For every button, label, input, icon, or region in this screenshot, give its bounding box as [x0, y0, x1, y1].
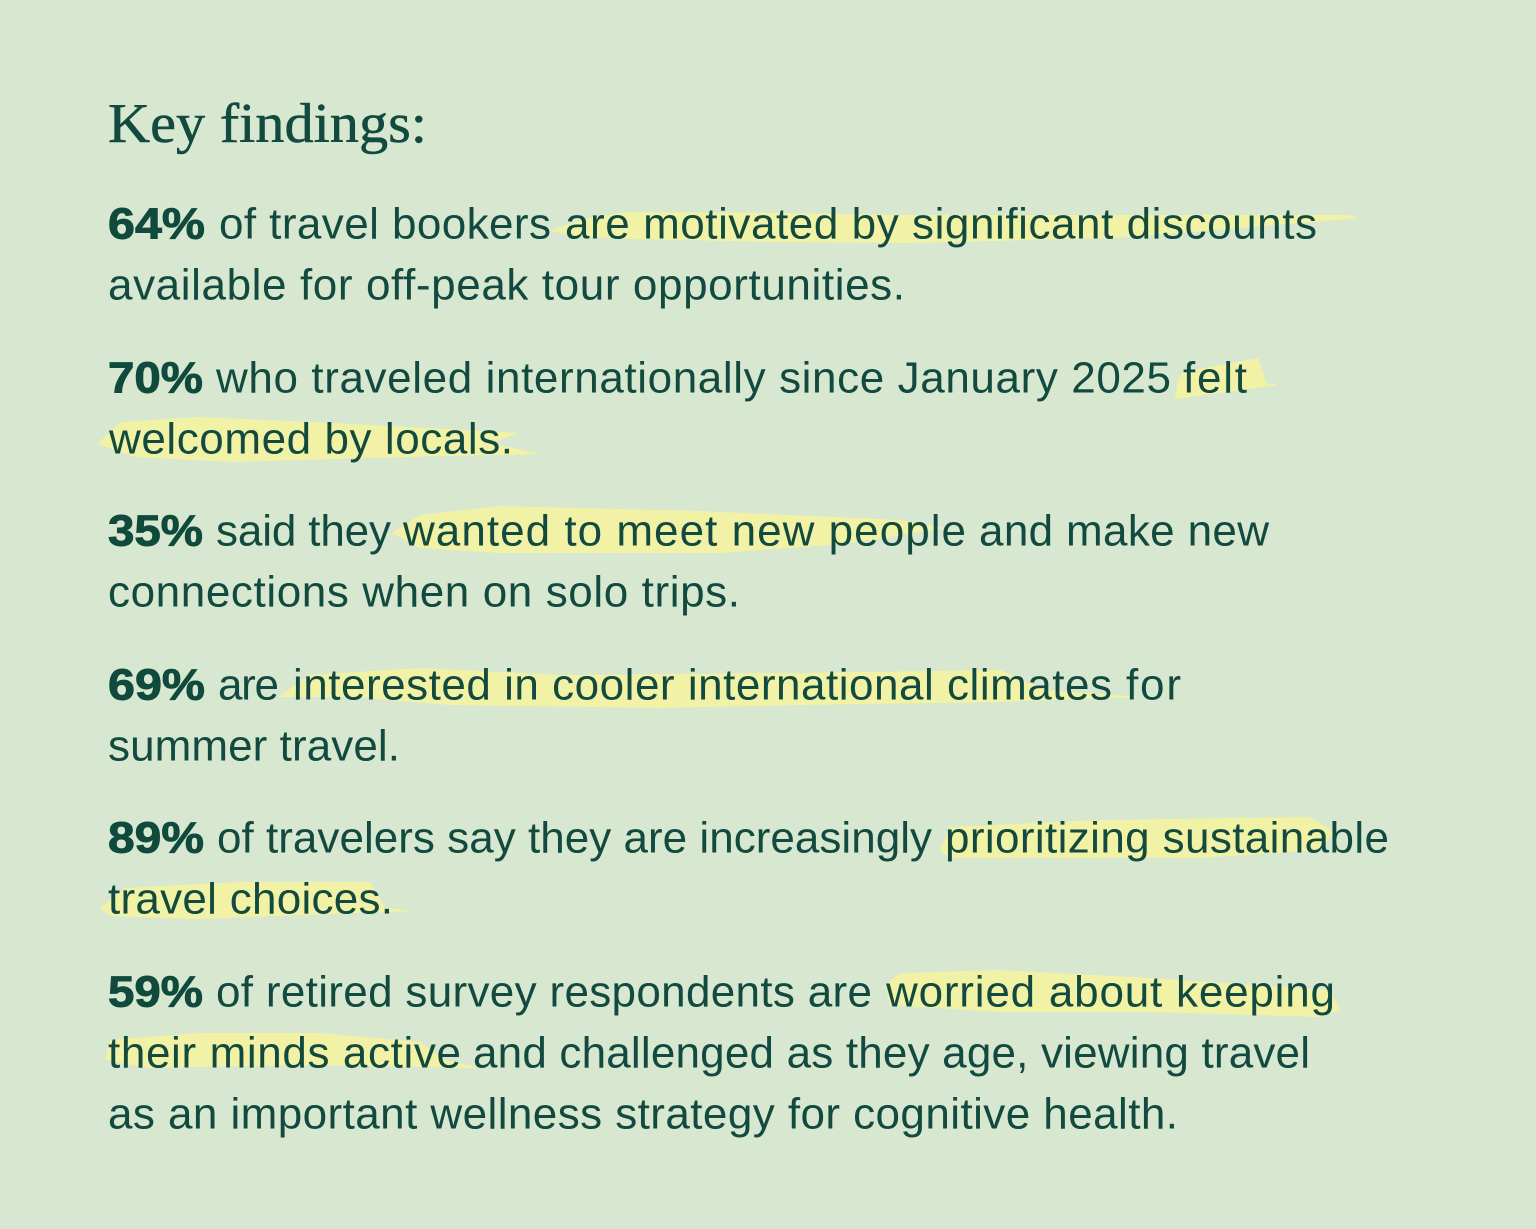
finding: 69% cooler climates	[108, 660, 1181, 770]
text: finding two: who traveled internationally since January 2025	[215, 354, 1171, 402]
stat: 69%: 69%	[108, 660, 205, 710]
text: finding six: of retired survey respondents are	[216, 968, 872, 1016]
text: finding three	[216, 506, 1269, 556]
text: finding five continued: travel choices.	[108, 874, 393, 924]
text: finding five: of travelers say they are increasingly	[217, 814, 932, 862]
stat: 59%: 59%	[108, 968, 203, 1016]
text: finding three: said they	[216, 506, 391, 556]
highlight: interested in cooler international climates	[278, 668, 1140, 708]
text: finding four: for	[1126, 660, 1181, 710]
text: finding six line two: and challenged as they age, viewing travel	[473, 1028, 1310, 1078]
text: finding four: are	[218, 660, 279, 710]
finding: 89% sustainable travel	[100, 814, 1389, 924]
finding: 70% welcomed	[97, 354, 1278, 464]
text: finding two continued: welcomed by locals.	[108, 414, 513, 464]
text: finding six line three: as an important wellness strategy for cognitive health.	[108, 1090, 1178, 1138]
highlight: their minds active	[105, 1033, 480, 1068]
finding: 35% new connections	[108, 506, 1269, 616]
text: finding five	[217, 814, 1389, 862]
finding: 59% cognitive health	[105, 968, 1340, 1138]
stat: 70%: 70%	[108, 354, 203, 402]
text: finding six	[216, 968, 1335, 1016]
highlight: travel choices	[100, 882, 415, 919]
text: finding one continued: available for off-peak tour opportunities.	[108, 260, 905, 310]
text: finding six line two	[108, 1028, 1310, 1078]
highlight: prioritizing sustainable	[940, 817, 1335, 858]
highlight: felt	[1175, 358, 1278, 399]
text: finding one	[219, 200, 1317, 248]
text: finding three: wanted to meet new people	[402, 506, 966, 556]
finding: 64% discounts	[108, 200, 1359, 310]
highlight: motivated by significant discounts	[550, 212, 1359, 243]
highlight: worried about keeping	[885, 970, 1340, 1017]
text: finding one: are motivated by significant discounts	[565, 200, 1317, 248]
text: finding five: prioritizing sustainable	[945, 814, 1389, 862]
text: finding two: felt	[1183, 354, 1247, 402]
text: finding three: and make new	[979, 506, 1269, 556]
text: finding six line two: their minds active	[108, 1028, 461, 1078]
stat: 35%: 35%	[108, 506, 203, 556]
stat: 64%: 64%	[108, 200, 205, 248]
text: finding three continued: connections when on solo trips.	[108, 568, 740, 616]
text: finding six: worried about keeping	[885, 968, 1335, 1016]
stat: 89%: 89%	[108, 814, 204, 862]
text: finding one: of travel bookers	[219, 200, 551, 248]
title: Key findings:	[108, 93, 427, 155]
text: finding four: interested in cooler international climates	[293, 660, 1112, 710]
highlight: welcomed by locals	[97, 417, 541, 462]
text: finding four continued: summer travel.	[108, 722, 400, 770]
highlight: wanted to meet new people	[392, 506, 945, 553]
